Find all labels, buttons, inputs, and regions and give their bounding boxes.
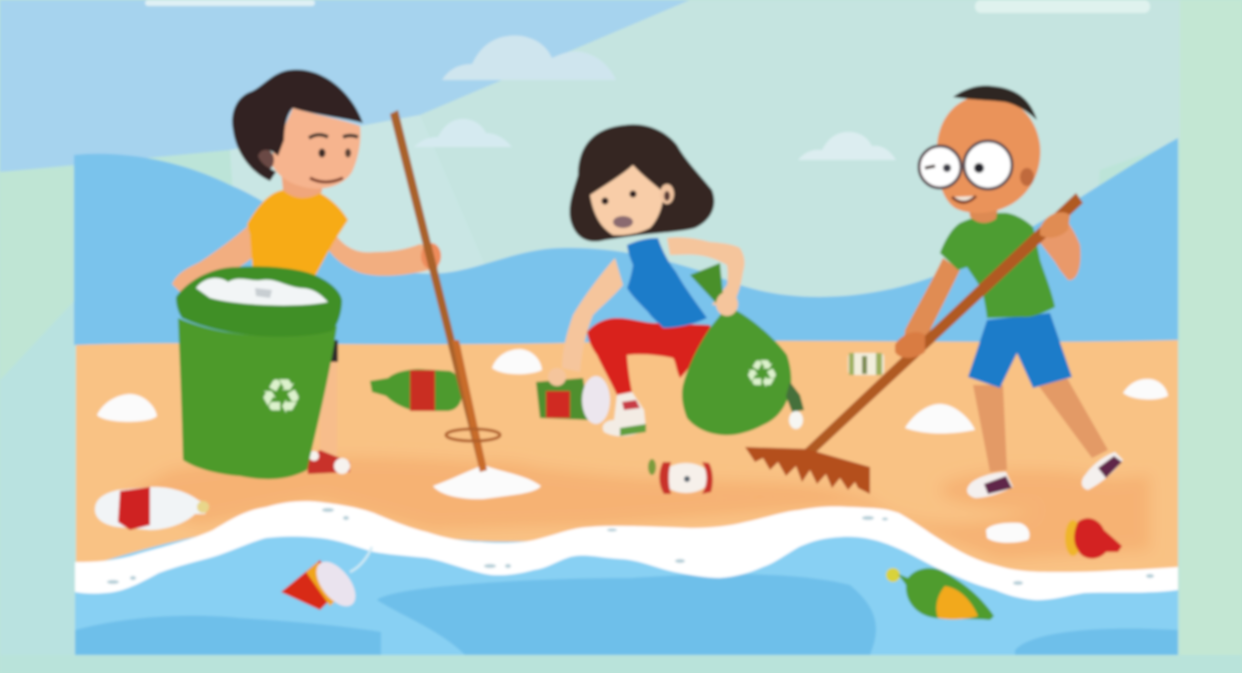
person: boy with rake	[903, 85, 1123, 498]
glasses	[919, 146, 961, 188]
litter: cup in water	[281, 547, 372, 613]
hand on stick	[421, 243, 441, 269]
neck	[280, 160, 322, 198]
broom stick with ring	[390, 110, 500, 472]
torso	[940, 213, 1055, 318]
sand shading	[120, 457, 1150, 560]
neck	[968, 195, 1000, 223]
litter: small can	[848, 353, 884, 375]
litter: red fruit	[1065, 518, 1122, 559]
head	[270, 108, 361, 189]
torso	[627, 238, 707, 328]
clouds	[414, 36, 896, 160]
bin body	[178, 318, 337, 479]
bottle near foot	[536, 368, 610, 424]
shorts	[968, 313, 1072, 388]
litter: apple core	[648, 459, 713, 494]
ear	[256, 149, 274, 171]
green bag	[682, 306, 791, 435]
hair	[232, 70, 363, 181]
hills	[74, 138, 1178, 345]
person: girl	[536, 124, 804, 436]
mouth	[952, 196, 976, 202]
leg behind bin	[307, 340, 350, 474]
foam	[75, 501, 1178, 600]
bin contents	[196, 278, 328, 305]
water	[75, 522, 1178, 655]
hair	[570, 124, 714, 241]
head	[937, 96, 1040, 213]
face	[309, 135, 358, 138]
litter: green bottle in water	[886, 568, 994, 620]
person: boy with bin	[172, 70, 441, 474]
litter: bottle left	[95, 487, 209, 530]
rake	[745, 193, 1083, 494]
recycling bin	[176, 266, 342, 479]
legs	[587, 318, 711, 395]
arms	[172, 226, 254, 292]
recycle icon: ♻	[259, 369, 303, 425]
ear	[1020, 168, 1034, 186]
sand mounds	[97, 349, 1168, 543]
person: girl: ♻	[745, 352, 779, 396]
litter: bottle on sand	[370, 369, 462, 411]
face	[590, 165, 663, 235]
shirt	[247, 188, 348, 280]
bin rim	[176, 266, 342, 337]
arms	[562, 258, 623, 372]
sand	[76, 340, 1178, 590]
arm back	[903, 258, 960, 352]
shoe	[603, 392, 646, 436]
hair	[953, 85, 1037, 120]
legs	[973, 385, 1007, 472]
